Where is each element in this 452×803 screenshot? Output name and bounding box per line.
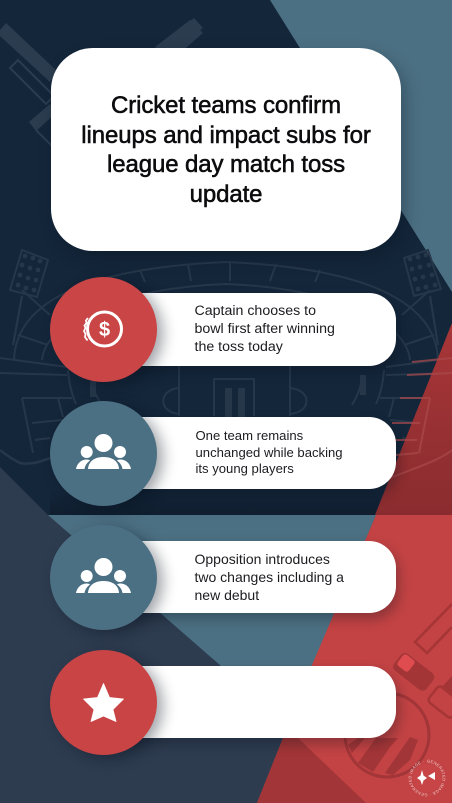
item 3 text: two changes including a	[194, 568, 344, 584]
item 3 text	[194, 550, 344, 602]
item 2 text: One team remains	[196, 428, 303, 443]
title: Cricket teams confirm	[111, 92, 341, 119]
item 1 text	[194, 302, 335, 354]
title card	[51, 48, 401, 251]
item 1 text: the toss today	[194, 338, 283, 354]
generated image badge: GENERATED IMAGE · GENERATED IMAGE ·	[408, 760, 446, 796]
item 2 text	[196, 428, 343, 476]
title: league day match toss	[107, 151, 345, 178]
floodlight left	[10, 250, 48, 345]
item 1 pill	[100, 292, 396, 366]
item 1 icon: coin	[50, 277, 157, 382]
title: update	[190, 180, 262, 208]
item 3 text: Opposition introduces	[194, 550, 330, 566]
item 3 icon: people	[50, 524, 157, 630]
bat and ball watermark	[345, 604, 452, 777]
item 4 icon: star	[50, 650, 157, 754]
item 1 text: Captain chooses to	[194, 302, 316, 318]
item 1 text: bowl first after winning	[194, 320, 335, 336]
title	[81, 92, 371, 208]
item 2 text: unchanged while backing	[196, 445, 343, 460]
red lower right	[257, 515, 452, 803]
teal band	[48, 515, 376, 666]
item 1 icon: coin: $	[99, 319, 110, 341]
stadium line art	[0, 262, 452, 464]
floodlight right	[404, 250, 441, 345]
item 3 text: new debut	[194, 586, 259, 602]
item 2 icon: people	[50, 400, 157, 506]
dark band above teal	[50, 490, 380, 515]
item 4 pill	[100, 666, 396, 738]
item 3 pill	[100, 540, 396, 612]
dark red wedge	[375, 323, 452, 515]
item 2 pill	[100, 417, 396, 488]
title: lineups and impact subs for	[81, 122, 371, 148]
item 2 text: its young players	[196, 461, 294, 476]
teal corner	[270, 0, 452, 292]
crossed bats watermark	[0, 18, 203, 146]
slate lower left	[0, 467, 452, 803]
